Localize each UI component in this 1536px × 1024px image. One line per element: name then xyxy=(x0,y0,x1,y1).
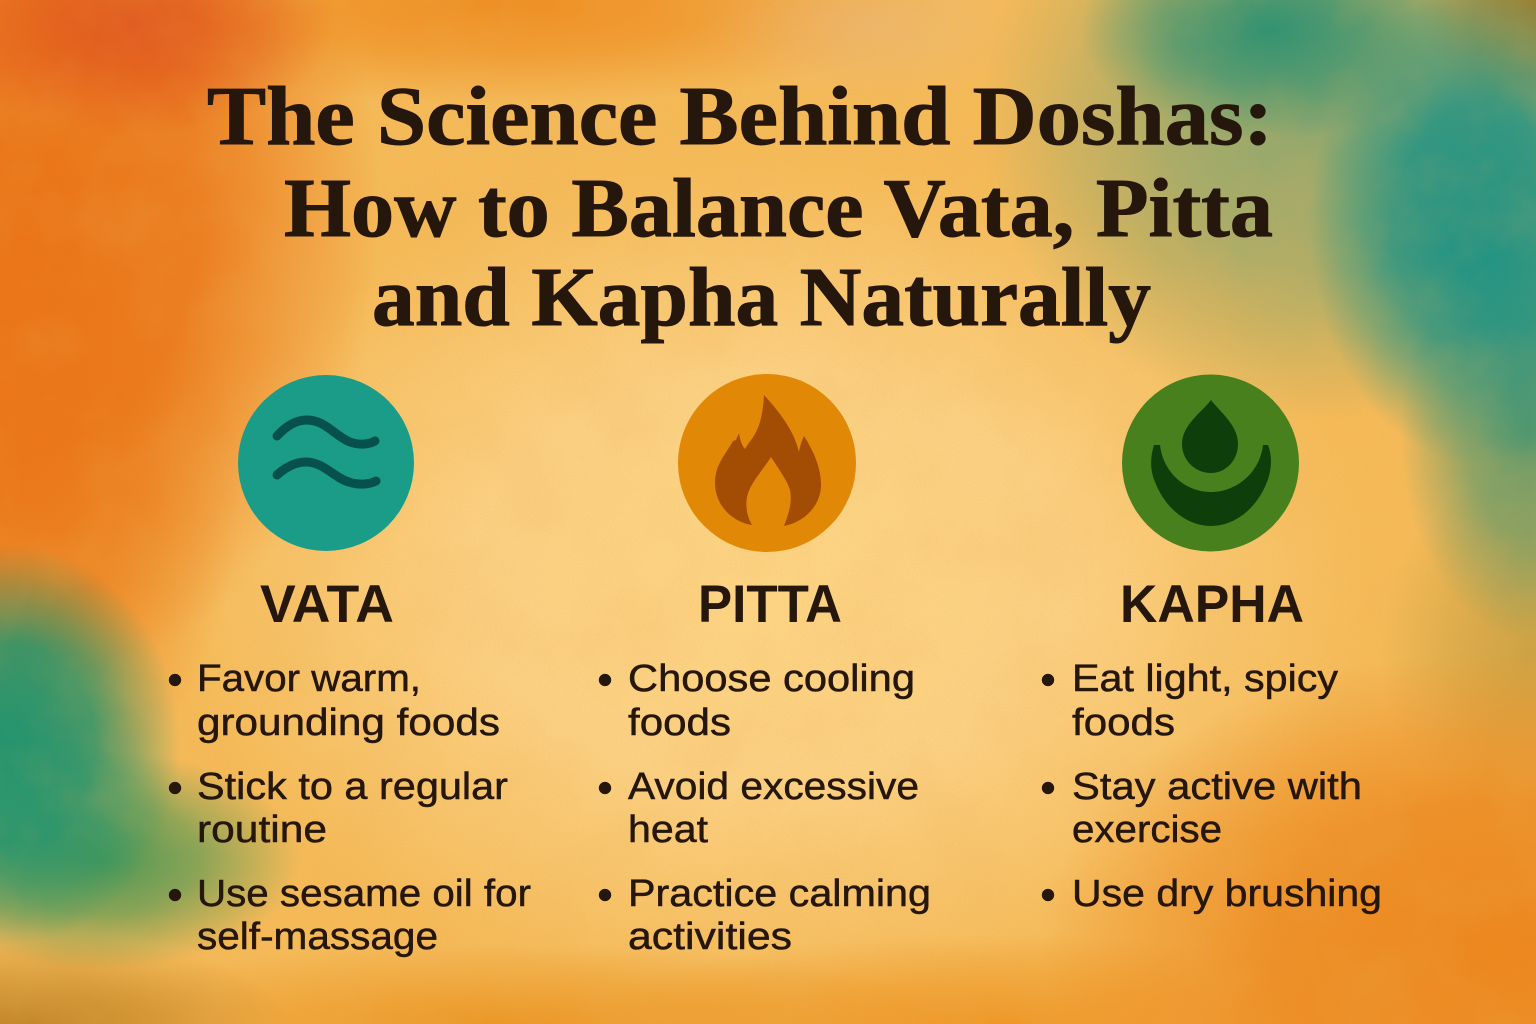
list: Kapha tips: Eat light, spicy xyxy=(1072,658,1338,700)
list: Kapha tips: Stay active with xyxy=(1072,766,1362,808)
list: Pitta tips: Practice calming xyxy=(628,873,931,915)
list: Vata tips xyxy=(169,658,531,958)
list: Vata tips: Favor warm, xyxy=(197,658,421,700)
icon: Vata air waves xyxy=(238,375,414,551)
heading: PITTA: PITTA xyxy=(698,575,842,634)
title: and Kapha Naturally xyxy=(372,251,1151,344)
list: Kapha tips: exercise xyxy=(1072,809,1222,851)
list: Kapha tips: foods xyxy=(1072,702,1175,744)
list: Vata tips: self-massage xyxy=(197,916,438,958)
heading: VATA: VATA xyxy=(260,575,394,634)
list: Pitta tips: foods xyxy=(628,702,731,744)
list: Pitta tips xyxy=(599,658,931,958)
list: Vata tips: routine xyxy=(197,809,327,851)
list: Vata tips: Use sesame oil for xyxy=(197,873,531,915)
panel: Vata xyxy=(169,375,531,958)
heading: KAPHA: KAPHA xyxy=(1120,575,1304,634)
panel: Kapha xyxy=(1042,374,1382,915)
icon: Pitta flame xyxy=(678,374,856,552)
list: Pitta tips: activities xyxy=(628,916,792,958)
list: Vata tips: grounding foods xyxy=(197,702,500,744)
list: Pitta tips: Avoid excessive xyxy=(628,766,919,808)
list: Kapha tips: Use dry brushing xyxy=(1072,873,1382,915)
icon: Kapha drop and crescent xyxy=(1122,374,1299,552)
title: How to Balance Vata, Pitta xyxy=(284,162,1273,255)
title: The Science Behind Doshas: xyxy=(207,70,1273,163)
list: Vata tips: Stick to a regular xyxy=(197,766,508,808)
list: Kapha tips xyxy=(1042,658,1382,915)
list: Pitta tips: heat xyxy=(628,809,708,851)
list: Pitta tips: Choose cooling xyxy=(628,658,915,700)
panel: Pitta xyxy=(599,374,931,958)
title xyxy=(207,70,1273,344)
